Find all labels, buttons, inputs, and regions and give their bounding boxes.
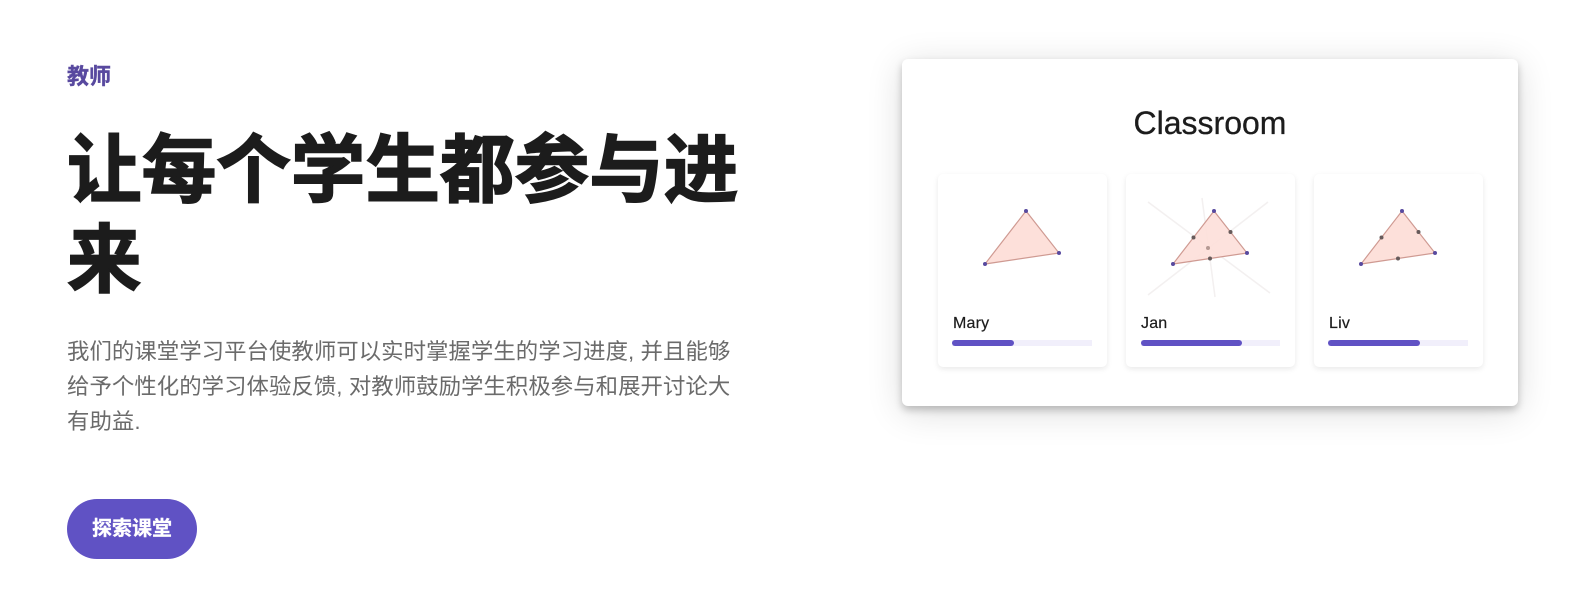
triangle diagram with bisectors [1148, 198, 1270, 297]
progress bar [952, 340, 1092, 346]
title [67, 128, 738, 302]
description text [67, 339, 730, 434]
name: Liv [1329, 315, 1350, 332]
name: Mary [953, 315, 989, 332]
triangle diagram with midpoints [1359, 209, 1437, 266]
triangle diagram [983, 209, 1061, 266]
eyebrow: teachers: 教师 [67, 64, 111, 89]
title: 来 [67, 218, 142, 302]
button: explore classroom: 探索课堂 [92, 518, 172, 540]
description text: 我们的课堂学习平台使教师可以实时掌握学生的学习进度, 并且能够 [67, 339, 730, 364]
panel: classroom [902, 59, 1518, 406]
progress bar [1328, 340, 1468, 346]
student card: Mary [938, 174, 1107, 367]
student card: Jan [1126, 174, 1295, 367]
title: 让每个学生都参与进 [67, 128, 738, 212]
student card: Liv [1314, 174, 1483, 367]
button: explore classroom [67, 499, 197, 559]
description text: 有助益. [67, 409, 141, 434]
panel heading: Classroom [1134, 105, 1286, 141]
description text: 给予个性化的学习体验反馈, 对教师鼓励学生积极参与和展开讨论大 [67, 374, 730, 399]
name: Jan [1141, 315, 1167, 332]
progress bar [1141, 340, 1280, 346]
